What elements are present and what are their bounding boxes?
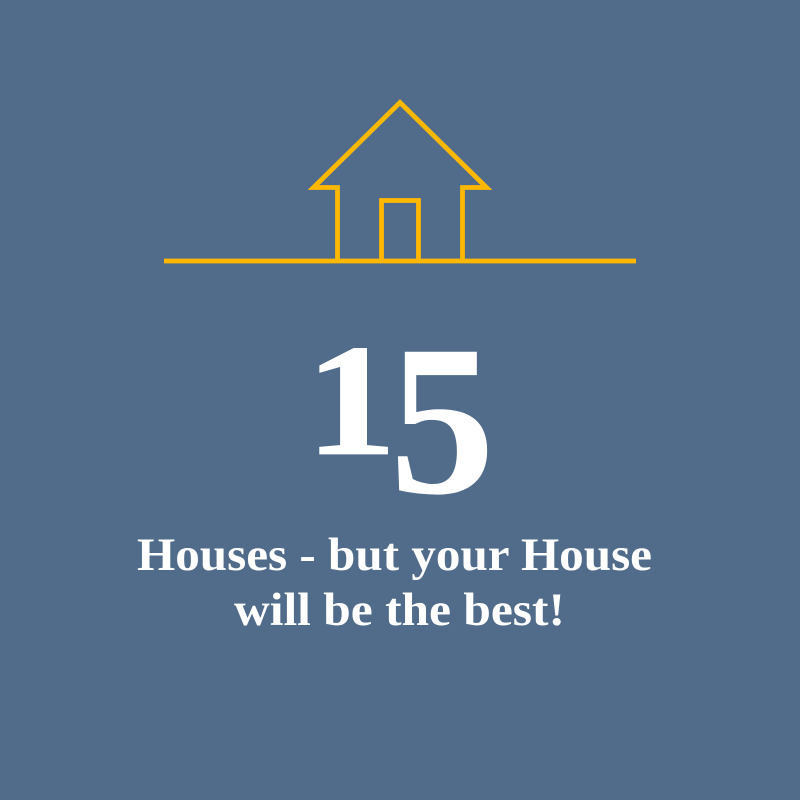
caption text (137, 529, 652, 636)
digit 1: 1 (305, 312, 397, 489)
door (382, 200, 418, 261)
icon: house on ground line (164, 102, 636, 261)
ground line (164, 259, 636, 263)
caption line 2: will be the best! (234, 584, 565, 636)
big number (305, 302, 495, 540)
digit 5: 5 (390, 302, 495, 540)
house outline (314, 102, 486, 261)
caption line 1: Houses - but your House (137, 529, 652, 581)
